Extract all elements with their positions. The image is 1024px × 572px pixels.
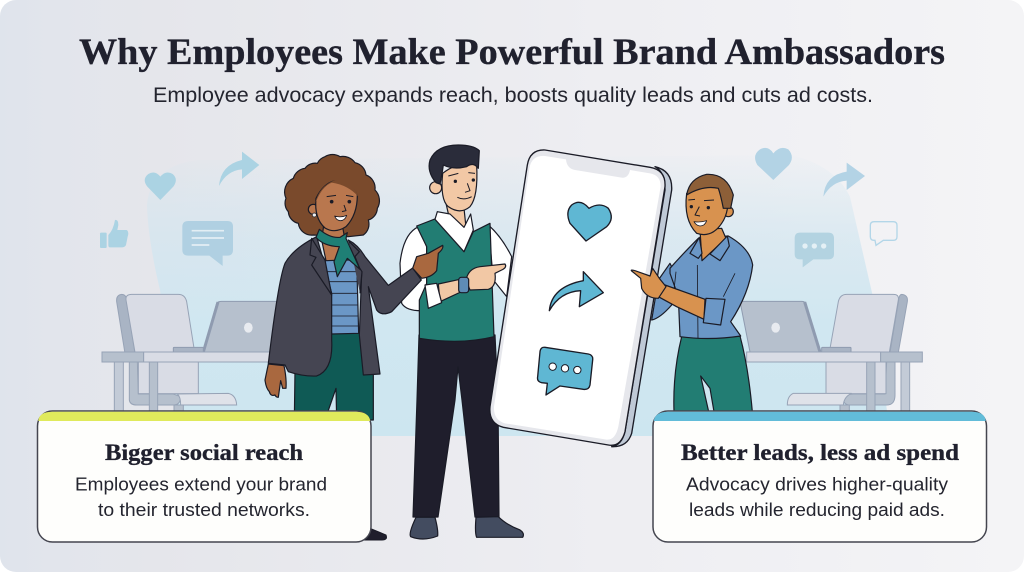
woman jacket right panel and arm bbox=[348, 240, 421, 375]
phone share arrow icon bbox=[549, 272, 603, 311]
man left sleeve bbox=[400, 227, 442, 311]
left background: icons and desk bbox=[100, 152, 277, 412]
blue shirt man hair bbox=[687, 174, 733, 208]
phone back edge bbox=[612, 167, 672, 447]
man head bbox=[442, 164, 477, 211]
man pointing hand bbox=[466, 264, 506, 290]
card heading left: Bigger social reach bbox=[105, 440, 303, 465]
woman scarf bbox=[316, 229, 360, 277]
card: bigger social reach bbox=[38, 411, 371, 542]
blue shirt neck bbox=[700, 228, 726, 261]
man watch bbox=[459, 277, 469, 293]
woman hair bbox=[285, 154, 379, 237]
man hair bbox=[429, 145, 479, 184]
card panel left bbox=[38, 411, 371, 542]
man shoes bbox=[410, 517, 523, 539]
woman in jacket bbox=[265, 154, 443, 420]
phone frame bbox=[490, 150, 665, 445]
man neck bbox=[446, 203, 466, 228]
icon: background thumbs up bbox=[100, 220, 128, 248]
blue shirt man ear and head bbox=[723, 207, 733, 217]
card panel right bbox=[653, 411, 986, 542]
right background: icons and desk bbox=[740, 148, 922, 412]
phone bbox=[490, 150, 672, 447]
man collar bbox=[435, 212, 473, 252]
man trousers bbox=[413, 335, 499, 517]
icon: background share arrow right bbox=[823, 163, 865, 197]
blue shirt sleeve behind arm bbox=[652, 263, 680, 320]
man in blue shirt bbox=[631, 174, 753, 412]
man forearm and cuff bbox=[438, 279, 465, 302]
right desk bbox=[747, 352, 922, 412]
right laptop bbox=[740, 301, 851, 352]
woman trousers bbox=[294, 332, 373, 420]
card: better leads, less ad spend bbox=[653, 411, 986, 542]
woman right hand pointing bbox=[413, 245, 443, 278]
phone chat icon bbox=[537, 347, 593, 395]
woman left hand bbox=[265, 364, 286, 397]
man face details bbox=[448, 173, 475, 199]
man right sleeve bbox=[488, 225, 512, 297]
icon: background heart right bbox=[755, 148, 792, 180]
left laptop bbox=[173, 301, 277, 352]
blue shirt man rolled cuff bbox=[703, 298, 725, 325]
woman striped top bbox=[325, 260, 359, 334]
blue shirt collar bbox=[690, 236, 729, 261]
card body right bbox=[686, 474, 949, 520]
card accent strip left bbox=[38, 412, 370, 421]
left chair bbox=[117, 294, 237, 412]
card body right: Advocacy drives higher-quality bbox=[686, 474, 949, 494]
card body left: to their trusted networks. bbox=[98, 499, 310, 520]
blue shirt man trousers bbox=[674, 336, 752, 412]
card body left bbox=[75, 474, 327, 520]
icon: background outline bubble bbox=[870, 222, 897, 245]
woman jacket left panel bbox=[268, 237, 332, 376]
woman neck bbox=[322, 223, 345, 261]
blue shirt man pointing hand bbox=[631, 268, 666, 298]
icon: background share arrow bbox=[219, 152, 259, 186]
woman face bbox=[308, 180, 359, 231]
blue shirt man forearm bbox=[658, 285, 705, 319]
subtitle: Employee advocacy expands reach, boosts quality leads and cuts ad costs. bbox=[153, 84, 873, 107]
icon: background chat dots bbox=[795, 233, 834, 267]
woman lapels bbox=[310, 238, 362, 295]
card body right: leads while reducing paid ads. bbox=[689, 499, 945, 520]
phone heart icon bbox=[568, 202, 611, 241]
icon: background heart bbox=[145, 172, 176, 200]
card body left: Employees extend your brand bbox=[75, 474, 327, 494]
icon: background message bubble bbox=[182, 221, 233, 266]
woman shoe bbox=[364, 528, 386, 540]
blue shirt body bbox=[670, 236, 753, 339]
man in green vest bbox=[400, 145, 523, 539]
right chair bbox=[787, 294, 907, 412]
title: Why Employees Make Powerful Brand Ambassadors bbox=[79, 32, 945, 73]
left desk bbox=[102, 352, 270, 412]
card heading right: Better leads, less ad spend bbox=[681, 440, 959, 465]
man vest bbox=[417, 218, 494, 341]
phone screen bbox=[494, 156, 661, 440]
card accent strip right bbox=[654, 412, 986, 421]
blue shirt man face details bbox=[688, 199, 714, 216]
blue backdrop shape bbox=[147, 155, 890, 436]
